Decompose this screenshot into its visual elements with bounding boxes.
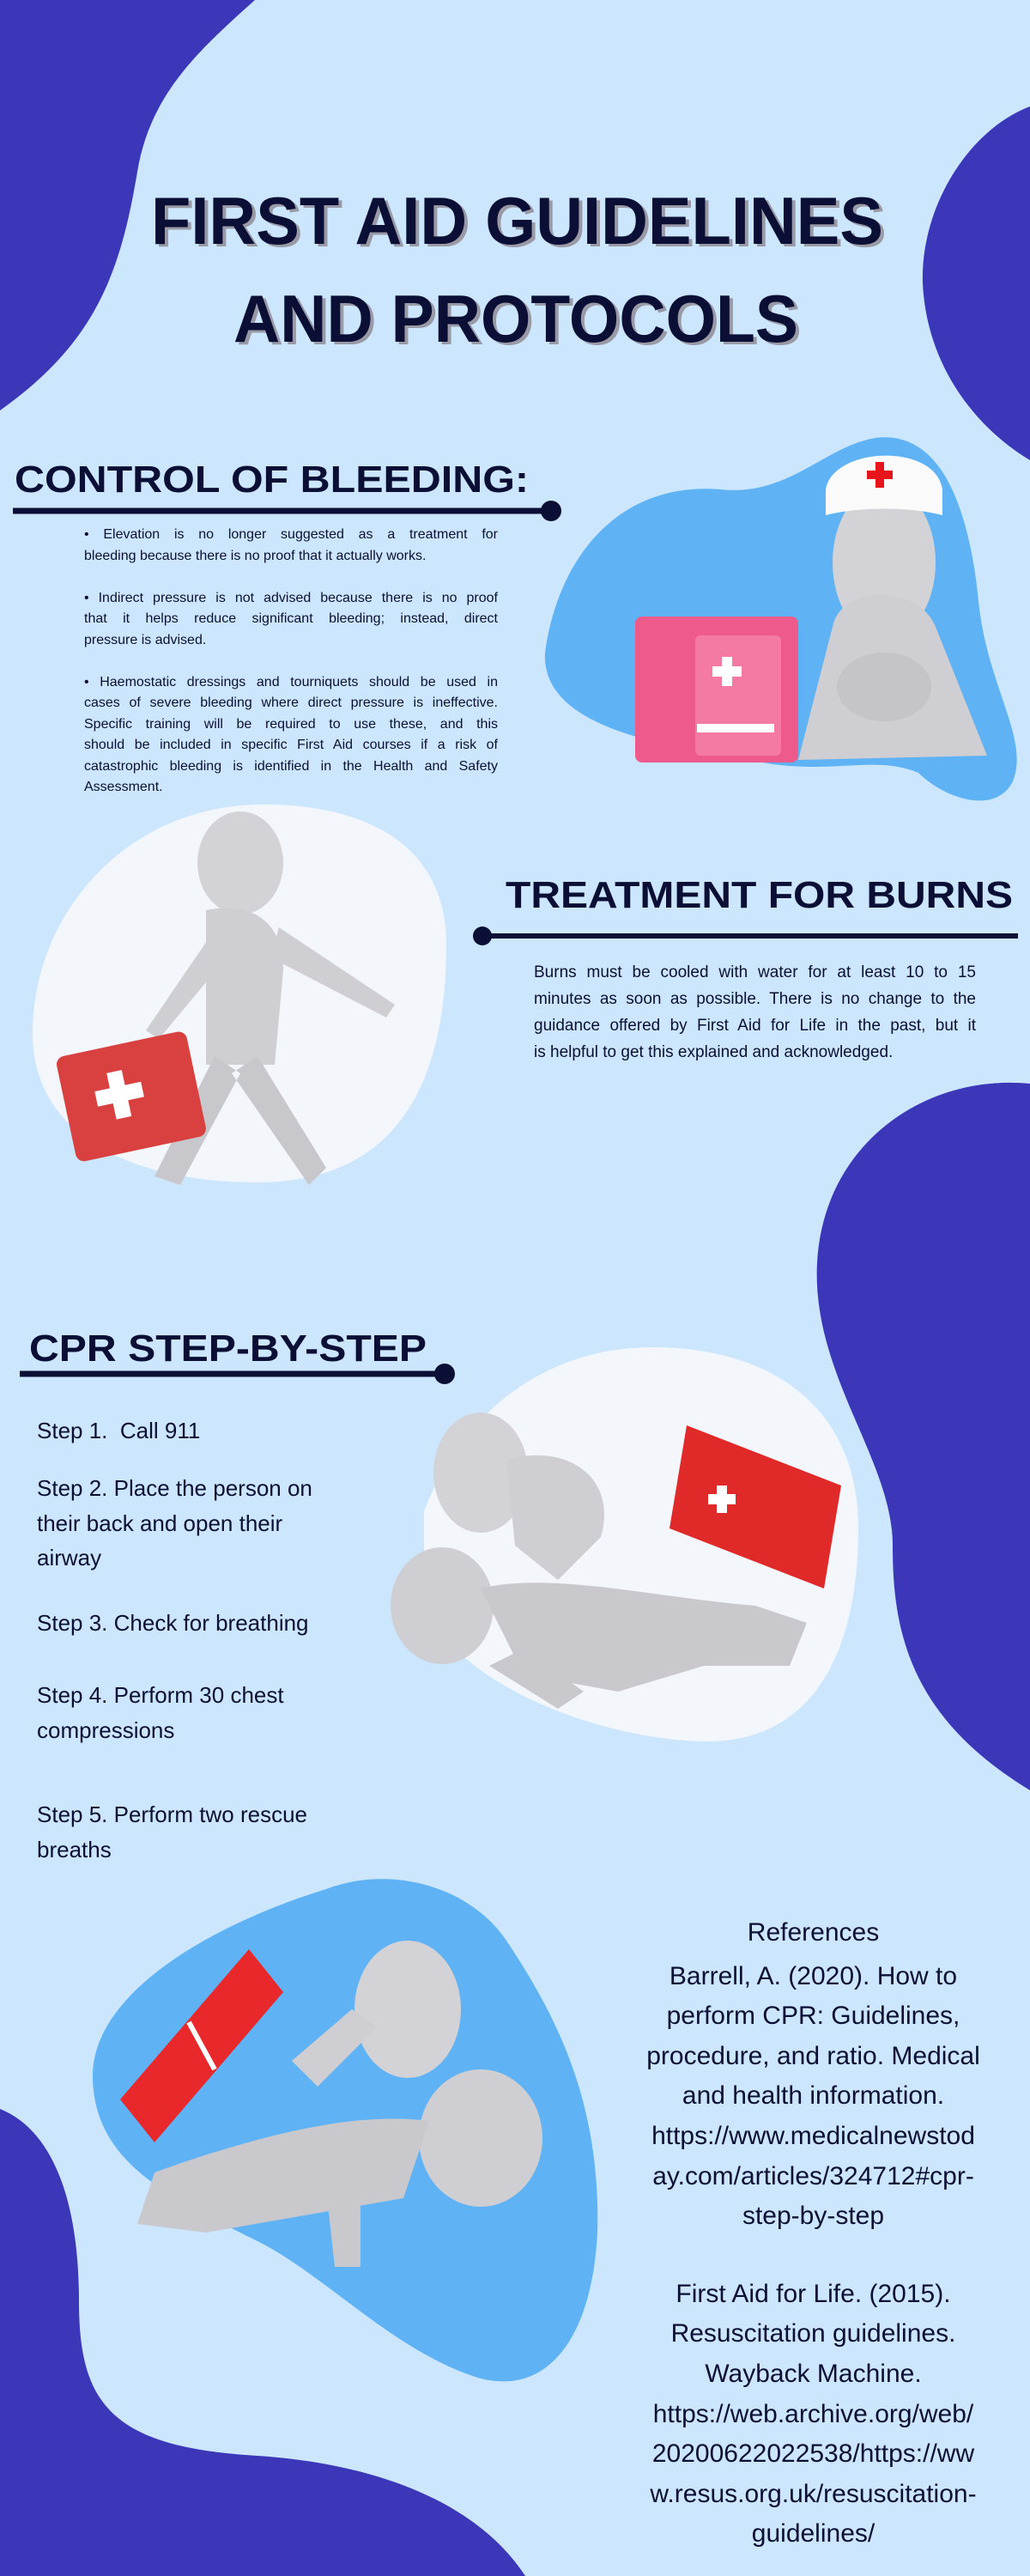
illustration: cpr figures (391, 1413, 841, 1709)
title (151, 183, 887, 359)
text: burns paragraph: guidance offered by First Aid for Life in the past, but it (534, 1017, 976, 1035)
heading: cpr step-by-step (20, 1327, 455, 1384)
illustration: walking figure with red kit (57, 811, 395, 1185)
step 2: airway (37, 1545, 101, 1571)
step 4: compressions (37, 1717, 174, 1743)
title: AND PROTOCOLS (233, 281, 798, 356)
text: bleeding bullets: that it helps reduce significant bleeding; instead, direct (84, 611, 498, 626)
references (646, 1918, 980, 2548)
references: https://www.medicalnewstod (651, 2122, 975, 2150)
references: and health information. (682, 2081, 944, 2110)
text: bleeding bullets: pressure is advised. (84, 632, 206, 647)
references: 20200622022538/https://ww (652, 2439, 974, 2468)
references: First Aid for Life. (2015). (676, 2280, 951, 2308)
step 3: Step 3. Check for breathing (37, 1610, 309, 1636)
references: procedure, and ratio. Medical (646, 2042, 980, 2070)
step 2: their back and open their (37, 1510, 282, 1535)
title: FIRST AID GUIDELINES (151, 183, 883, 258)
heading: treatment for burns: TREATMENT FOR BURNS (506, 874, 1013, 916)
step 4 (37, 1682, 284, 1743)
text: bleeding bullets: catastrophic bleeding is identified in the Health and Safety (84, 759, 498, 773)
heading: control of bleeding: CONTROL OF BLEEDING: (15, 459, 529, 501)
references: guidelines/ (752, 2519, 875, 2548)
text: burns paragraph: minutes as soon as possible. There is no change to the (534, 990, 976, 1008)
heading: cpr step-by-step: CPR STEP-BY-STEP (29, 1327, 427, 1370)
text: burns paragraph (534, 963, 976, 1061)
references: Resuscitation guidelines. (671, 2319, 955, 2348)
text: bleeding bullets: • Haemostatic dressings and tourniquets should be used in (84, 675, 498, 689)
references: w.resus.org.uk/resuscitation- (650, 2480, 977, 2508)
illustration: rescue breaths (120, 1941, 542, 2267)
references: References (748, 1918, 879, 1947)
illustration: nurse with pink kit (635, 455, 987, 762)
step 2: Step 2. Place the person on (37, 1475, 312, 1501)
references: ay.com/articles/324712#cpr- (652, 2162, 974, 2190)
text: bleeding bullets: cases of severe bleeding where direct pressure is ineffective. (84, 696, 498, 710)
references: Barrell, A. (2020). How to (670, 1962, 957, 1990)
text: bleeding bullets: Specific training will be required to use these, and this (84, 716, 498, 732)
text: burns paragraph: Burns must be cooled with water for at least 10 to 15 (534, 963, 976, 981)
references: perform CPR: Guidelines, (667, 2002, 960, 2030)
heading: treatment for burns (473, 874, 1018, 945)
step 2 (37, 1475, 312, 1571)
step 5 (37, 1801, 307, 1862)
text: bleeding bullets: • Indirect pressure is not advised because there is no proof (84, 591, 498, 605)
title: FIRST AID GUIDELINES (154, 185, 887, 261)
step 5: Step 5. Perform two rescue (37, 1801, 307, 1827)
step 1: Step 1. Call 911 (37, 1418, 200, 1443)
text: bleeding bullets: • Elevation is no longer suggested as a treatment for (84, 527, 498, 542)
text: burns paragraph: is helpful to get this explained and acknowledged. (534, 1043, 893, 1061)
references: Wayback Machine. (705, 2360, 922, 2388)
cpr steps (37, 1418, 312, 1862)
heading: control of bleeding (13, 459, 561, 521)
references: step-by-step (742, 2202, 884, 2230)
step 5: breaths (37, 1836, 112, 1862)
text: bleeding bullets (84, 527, 498, 794)
text: bleeding bullets: Assessment. (84, 780, 163, 794)
title: AND PROTOCOLS (237, 283, 802, 359)
references: https://web.archive.org/web/ (653, 2400, 973, 2428)
step 4: Step 4. Perform 30 chest (37, 1682, 284, 1708)
text: bleeding bullets: bleeding because there is no proof that it actually works. (84, 548, 426, 563)
text: bleeding bullets: should be included in specific First Aid courses if a risk of (84, 738, 498, 752)
